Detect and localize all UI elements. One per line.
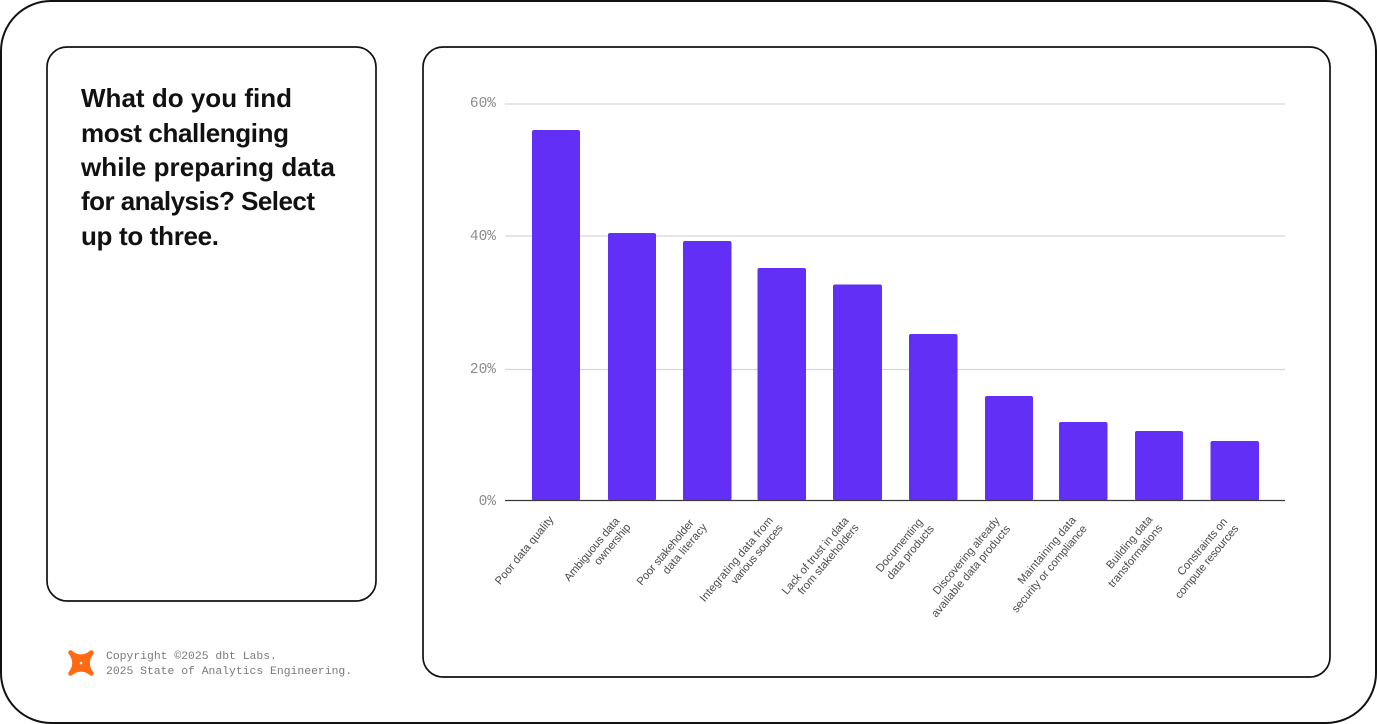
x axis labels: from stakeholders (796, 522, 862, 597)
x axis labels: Lack of trust in data (780, 515, 852, 597)
heading: survey question: up to three. (81, 221, 219, 251)
x axis labels: Building data (1104, 513, 1156, 571)
heading: survey question: What do you find (81, 83, 292, 113)
x axis labels: available data products (929, 523, 1013, 620)
x axis labels: compute resources (1173, 523, 1242, 601)
x axis labels: Maintaining data (1016, 514, 1079, 587)
heading: survey question (80, 83, 336, 251)
panel: question (47, 47, 376, 601)
x axis baseline (505, 500, 1285, 502)
heading: survey question: most challenging (81, 118, 289, 148)
bars (532, 130, 1259, 500)
copyright note: Copyright ©2025 dbt Labs. (106, 651, 277, 663)
y axis gridlines (505, 104, 1285, 370)
panel: chart (423, 47, 1330, 677)
x axis labels: various sources (729, 522, 786, 587)
x axis labels: Constraints on (1175, 516, 1230, 578)
copyright note: 2025 State of Analytics Engineering. (106, 666, 352, 678)
x axis labels: data products (885, 523, 937, 582)
x axis labels: Integrating data from (698, 515, 776, 604)
heading: survey question: for analysis? Select (81, 186, 315, 216)
y axis labels (470, 96, 496, 510)
x axis labels: ownership (592, 522, 633, 568)
x axis labels: Poor stakeholder (635, 517, 697, 588)
icon: dbt logo (70, 652, 92, 674)
x axis labels: Poor data quality (493, 514, 557, 587)
heading: survey question: while preparing data (80, 152, 336, 182)
y axis labels: 0% (479, 494, 496, 510)
x axis labels: security or compliance (1010, 523, 1090, 615)
y axis labels: 60% (470, 96, 496, 112)
x axis labels: transformations (1106, 522, 1166, 590)
x axis labels: Discovering already (931, 515, 1003, 597)
x axis labels: Ambiguous data (562, 515, 623, 584)
y axis labels: 20% (470, 362, 496, 378)
y axis labels: 40% (470, 229, 496, 245)
x axis labels: Documenting (874, 517, 926, 575)
copyright note (106, 651, 352, 678)
x axis labels (493, 513, 1242, 620)
x axis labels: data literacy (661, 521, 710, 577)
bar chart (470, 96, 1285, 620)
